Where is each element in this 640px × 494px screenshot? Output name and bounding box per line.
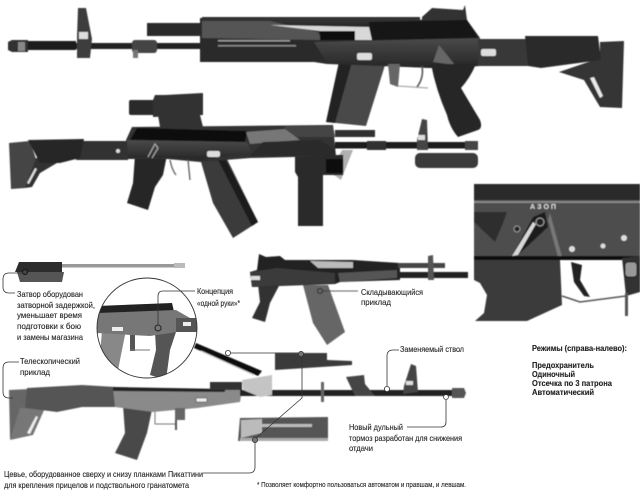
bolt carrier and leader xyxy=(3,262,185,293)
label: bolt: Затвор оборудован xyxy=(17,290,83,299)
inset circle: one-hand concept xyxy=(97,278,206,380)
label: handguard xyxy=(4,470,203,490)
label: folding stock xyxy=(361,288,423,307)
text block: firing modes: Режимы (справа-налево): xyxy=(532,344,627,353)
text block: firing modes: Отсечка по 3 патрона xyxy=(532,379,613,388)
text block: firing modes: Одиночный xyxy=(532,370,575,379)
label: bolt: уменьшает время xyxy=(17,311,82,320)
label: one-hand concept: Концепция xyxy=(197,287,233,296)
rifle: with scope and vertical grip xyxy=(9,93,478,238)
label: telescopic stock: приклад xyxy=(20,368,50,377)
label: folding stock: приклад xyxy=(361,298,391,307)
close-up marking: А З О П xyxy=(530,204,556,211)
label: telescopic stock xyxy=(20,357,80,377)
label: telescopic stock: Телескопический xyxy=(20,357,80,366)
label: bolt: и замены магазина xyxy=(17,333,84,342)
text block: firing modes xyxy=(532,344,627,397)
label: muzzle brake xyxy=(349,423,462,453)
rifle: top view with folding stock xyxy=(8,5,624,180)
text block: firing modes: Предохранитель xyxy=(532,361,594,370)
label: bolt: затворной задержкой, xyxy=(17,301,95,310)
label: folding stock: Складывающийся xyxy=(361,288,423,297)
label: handguard: Цевье, оборудованное сверху и снизу планками Пикаттини xyxy=(4,470,203,479)
label: one-hand concept: «одной руки»* xyxy=(197,299,240,308)
rifle: exploded view with parts xyxy=(9,343,466,460)
leader lines xyxy=(3,350,448,473)
label: handguard: для крепления прицелов и подствольного гранатомета xyxy=(4,481,189,490)
label: bolt xyxy=(17,290,95,342)
label: replaceable barrel: Заменяемый ствол xyxy=(400,345,464,354)
label: one-hand concept xyxy=(197,287,240,308)
label: muzzle brake: отдачи xyxy=(349,444,373,453)
footnote: * Позволяет комфортно пользоваться автоматом и правшам, и левшам. xyxy=(257,482,466,489)
label: bolt: подготовки к бою xyxy=(17,322,81,331)
label: muzzle brake: тормоз разработан для снижения xyxy=(349,434,462,443)
text block: firing modes: Автоматический xyxy=(532,388,594,397)
rifle: folded stock xyxy=(250,254,468,345)
close-up photo: fire selector xyxy=(474,184,640,321)
label: muzzle brake: Новый дульный xyxy=(349,423,403,432)
